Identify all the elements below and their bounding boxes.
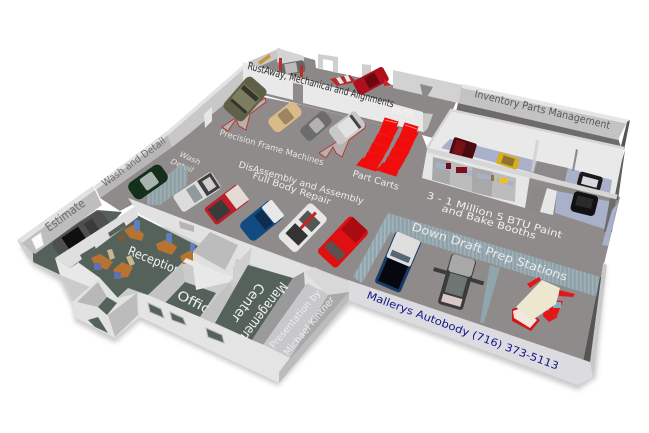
part carts bbox=[357, 118, 418, 176]
office block bbox=[148, 232, 252, 323]
car lift: right frame machine bbox=[319, 124, 365, 158]
car: yellow in booth bbox=[496, 152, 520, 170]
small room lower left bbox=[72, 278, 140, 338]
car: black and white in booth bbox=[576, 171, 603, 192]
car: dark red in booth bbox=[449, 137, 477, 161]
label: wash detail bbox=[169, 150, 202, 175]
car: white and red race car bbox=[277, 202, 328, 254]
car: red sedan in back room bbox=[352, 66, 390, 96]
label: inventory parts management: Inventory Parts Management bbox=[473, 88, 611, 132]
window bbox=[179, 221, 194, 232]
curtain: wash bay bbox=[147, 165, 188, 205]
car: dark sedan in back room bbox=[278, 60, 306, 76]
car: olive suv bbox=[221, 75, 269, 123]
car: silver van bbox=[327, 110, 367, 146]
car lift: left frame machine bbox=[222, 98, 266, 131]
car: blue pickup bbox=[374, 231, 422, 293]
curtains: down draft prep stations bbox=[353, 213, 600, 323]
car: dark grey sedan bbox=[50, 209, 114, 263]
estimate room bbox=[17, 186, 122, 277]
car: grey truck with open doors bbox=[425, 250, 489, 314]
presentation panel bbox=[263, 267, 349, 372]
wall: right side bbox=[583, 263, 607, 377]
label: parts: Parts bbox=[391, 106, 414, 119]
wall: wash and detail bbox=[94, 131, 172, 198]
label: down draft prep stations: Down Draft Prep Stations bbox=[410, 220, 569, 284]
label: management center: Managemen bbox=[237, 279, 291, 343]
label: management center: Center bbox=[227, 280, 268, 326]
car: cream van with red doors bbox=[512, 277, 575, 331]
reception room bbox=[55, 205, 200, 300]
label: rustaway mechanical and alignments: RustAway, Mechanical and Alignments bbox=[246, 60, 395, 110]
label: disassembly and assembly full body repair: Full Body Repair bbox=[251, 171, 332, 208]
car: gold sedan bbox=[266, 100, 304, 134]
booth wall tops bbox=[427, 110, 624, 197]
reception furniture bbox=[91, 220, 196, 279]
label: presentation by michael kintner: Michael Kintner bbox=[282, 295, 337, 358]
wall: front exterior with windows bbox=[138, 292, 349, 383]
label: precision frame machines: Precision Frame Machines bbox=[218, 128, 325, 168]
management center bbox=[215, 265, 305, 345]
label: disassembly and assembly full body repair: DisAssembly and Assembly bbox=[237, 160, 365, 207]
label: part carts: Part Carts bbox=[351, 169, 400, 193]
car: dark silver sedan bbox=[299, 109, 333, 143]
wall: upper left bbox=[165, 65, 245, 147]
car: red van bbox=[316, 215, 370, 269]
car: black in booth bay bbox=[570, 190, 599, 217]
car: green car in wash bay bbox=[126, 162, 170, 202]
label: estimate: Estimate bbox=[43, 196, 88, 234]
label: reception: Reception bbox=[126, 243, 183, 278]
label: wash detail: Wash bbox=[178, 150, 202, 167]
label: paint and bake booths: and Bake Booths bbox=[440, 203, 537, 242]
paint and bake booths bbox=[422, 110, 625, 246]
wall: rustaway mechanical and alignments bbox=[243, 60, 433, 133]
booth front wall bbox=[422, 149, 625, 246]
drop shadow bbox=[20, 200, 606, 390]
main shop floor bbox=[100, 93, 620, 362]
back room bbox=[243, 48, 462, 140]
label: office: Offic bbox=[174, 288, 212, 317]
wall: front below floor bbox=[128, 198, 349, 297]
wall: front with phone number bbox=[348, 280, 593, 385]
label: paint and bake booths bbox=[425, 190, 564, 242]
car: blue and white coupe bbox=[238, 198, 285, 243]
label: paint and bake booths: 3 - 1 Million 5 BTU Paint bbox=[425, 190, 564, 241]
car: white pickup bbox=[172, 171, 222, 213]
label: presentation by michael kintner: Presentation by bbox=[268, 288, 323, 351]
label: wash detail: Detail bbox=[169, 157, 196, 175]
label: wash and detail: Wash and Detail bbox=[100, 136, 168, 189]
wall: inventory parts management bbox=[456, 84, 630, 150]
label: phone number: Mallerys Autobody (716) 373-5113 bbox=[365, 290, 560, 373]
car: red and white pickup bbox=[204, 184, 250, 226]
red equipment bbox=[279, 58, 391, 86]
